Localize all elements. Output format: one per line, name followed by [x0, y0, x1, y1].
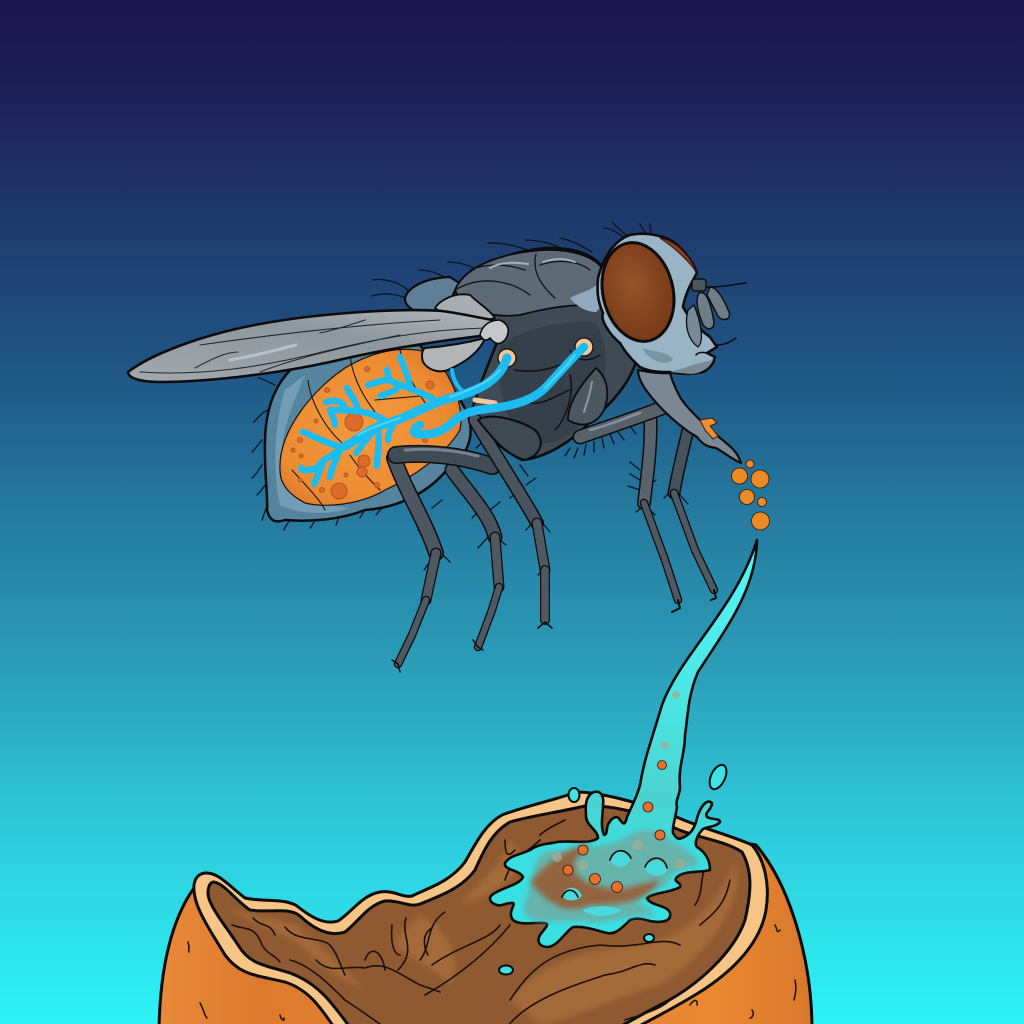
calypter lobe under wing: [422, 338, 485, 371]
thorax front shoulder segment: [568, 368, 607, 425]
blue digestive tubes: [301, 338, 593, 484]
proboscis: [638, 370, 741, 463]
loose splash droplets: [499, 762, 730, 974]
legs: [392, 408, 716, 672]
coxa segments: [478, 417, 541, 460]
brown flesh: [208, 806, 750, 1024]
shell lighter patches: [275, 375, 350, 513]
thorax side patch: [570, 282, 604, 312]
thorax lower side shading: [499, 322, 606, 445]
lip shading: [670, 360, 713, 374]
antennae: [692, 279, 730, 329]
splash highlight arcs: [562, 851, 667, 897]
abdomen bubbles: [291, 366, 434, 499]
body hairs: [252, 222, 688, 575]
leg: near front: [580, 408, 680, 612]
proboscis orange bits: [700, 418, 718, 439]
orange droplets: [732, 460, 770, 530]
leg: hind: [392, 458, 436, 672]
orange particles in fluid: [563, 760, 666, 892]
back scale patch: [435, 294, 495, 320]
wing veins: [140, 320, 495, 373]
fly: [128, 222, 770, 672]
thorax back lobe: [405, 277, 470, 320]
thorax body: [452, 248, 640, 460]
leg: hind femur: [396, 449, 492, 466]
abdomen translucent shell: [265, 345, 471, 521]
abdomen segment lines: [292, 350, 432, 510]
mouth lip: [696, 352, 707, 355]
cream rim: [194, 792, 767, 1024]
leg: far front: [674, 430, 716, 600]
wing: [128, 310, 503, 382]
compound eye: [593, 235, 683, 349]
head: [598, 234, 717, 374]
antenna bristles: [706, 283, 746, 345]
tube network: [301, 347, 584, 484]
orange abdomen interior: [280, 349, 461, 505]
flesh cracks: [232, 820, 730, 1024]
peel pits: [188, 925, 796, 1020]
leg: middle: [475, 420, 552, 628]
fluid stream and splash puddle: [490, 540, 757, 947]
translucent puddle interior: [524, 830, 699, 922]
leg: middle rear: [452, 470, 499, 650]
head shading: [642, 348, 673, 363]
fruit peel: [159, 810, 812, 1024]
splash highlights: [562, 852, 667, 916]
tube rings: [475, 338, 593, 403]
wing hinge: [480, 320, 508, 344]
faded particles: [552, 691, 685, 870]
flesh highlights: [225, 840, 737, 1024]
fruit: halved rotting orange: [159, 540, 812, 1024]
facial ridge: [686, 305, 701, 347]
thorax plates: [455, 250, 604, 316]
red crown patch: [660, 238, 697, 273]
brown flesh seen through fluid: [530, 843, 660, 909]
tube highlights: [358, 355, 575, 435]
